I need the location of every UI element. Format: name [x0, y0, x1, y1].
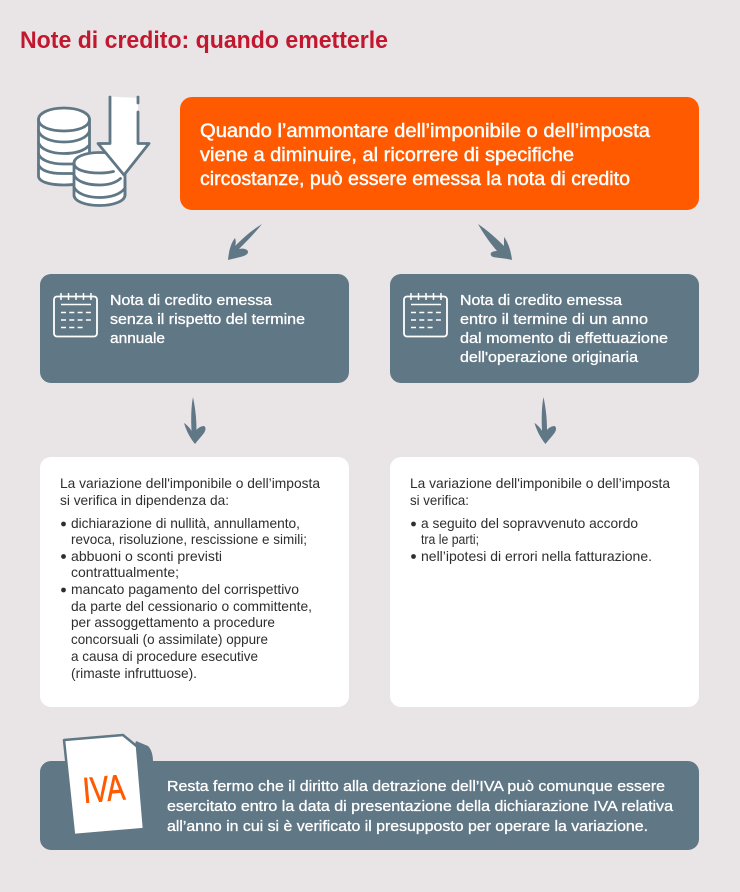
panel: orange statement: circostanze, può essere emessa la nota di credito	[200, 169, 630, 190]
bullet	[61, 588, 66, 592]
title: Note di credito: quando emetterle	[20, 27, 388, 54]
panel: orange statement: viene a diminuire, al ricorrere di specifiche	[200, 145, 574, 166]
icon: coins with down arrow	[38, 96, 149, 206]
panel: without annual term	[40, 274, 349, 383]
panel: left details: a causa di procedure esecutive	[71, 649, 258, 664]
arrow: down left	[184, 397, 206, 444]
panel: within one year: entro il termine di un anno	[460, 312, 648, 328]
panel: right details: La variazione dell'imponibile o dell’imposta	[410, 476, 670, 491]
panel: IVA note: Resta fermo che il diritto alla detrazione dell’IVA può comunque essere	[167, 779, 665, 795]
panel: orange statement	[180, 97, 699, 210]
panel: without annual term: Nota di credito emessa	[110, 293, 273, 309]
arrow: to right panel	[478, 224, 512, 260]
panel: left details: La variazione dell'imponibile o dell’imposta	[60, 476, 320, 491]
panel: IVA note: all’anno in cui si è verificato il presupposto per operare la variazione.	[167, 819, 648, 835]
panel: without annual term: senza il rispetto del termine	[110, 312, 305, 328]
panel: right details: si verifica:	[410, 493, 469, 508]
icon: IVA document: IVA	[81, 766, 127, 811]
icon: calendar	[404, 293, 447, 336]
panel: left details: per assoggettamento a procedure	[71, 615, 275, 630]
bullet	[61, 522, 66, 526]
panel: left details: (rimaste infruttuose).	[71, 666, 197, 681]
panel: left details: abbuoni o sconti previsti	[71, 549, 222, 564]
panel: left details: mancato pagamento del corrispettivo	[71, 582, 299, 597]
panel: within one year: dell'operazione originaria	[460, 350, 639, 366]
bullet	[411, 554, 416, 559]
panel: right details: tra le parti;	[421, 532, 479, 547]
panel: within one year: Nota di credito emessa	[460, 293, 623, 309]
panel: left details	[40, 457, 349, 707]
bullet	[61, 554, 66, 559]
panel: right details	[390, 457, 699, 707]
panel: right details: nell’ipotesi di errori nella fatturazione.	[421, 549, 652, 564]
panel: within one year	[390, 274, 699, 383]
panel: within one year: dal momento di effettuazione	[460, 331, 668, 347]
panel: orange statement: Quando l’ammontare dell’imponibile o dell’imposta	[200, 121, 650, 142]
panel: left details: contrattualmente;	[71, 565, 179, 580]
panel: right details: a seguito del sopravvenuto accordo	[421, 516, 638, 531]
panel: left details: dichiarazione di nullità, annullamento,	[71, 516, 300, 531]
arrow: to left panel	[228, 224, 262, 260]
bullet	[411, 522, 416, 526]
panel: left details: si verifica in dipendenza da:	[60, 493, 229, 508]
panel: IVA note	[40, 735, 699, 850]
panel: without annual term: annuale	[110, 331, 165, 347]
arrow: down right	[534, 397, 556, 444]
icon: calendar	[54, 293, 97, 336]
icon: IVA document	[64, 735, 144, 835]
panel: IVA note: esercitato entro la data di presentazione della dichiarazione IVA relativa	[167, 799, 674, 815]
panel: left details: da parte del cessionario o committente,	[71, 599, 312, 614]
panel: left details: revoca, risoluzione, rescissione e simili;	[71, 532, 307, 547]
panel: left details: concorsuali (o assimilate) oppure	[71, 632, 268, 647]
